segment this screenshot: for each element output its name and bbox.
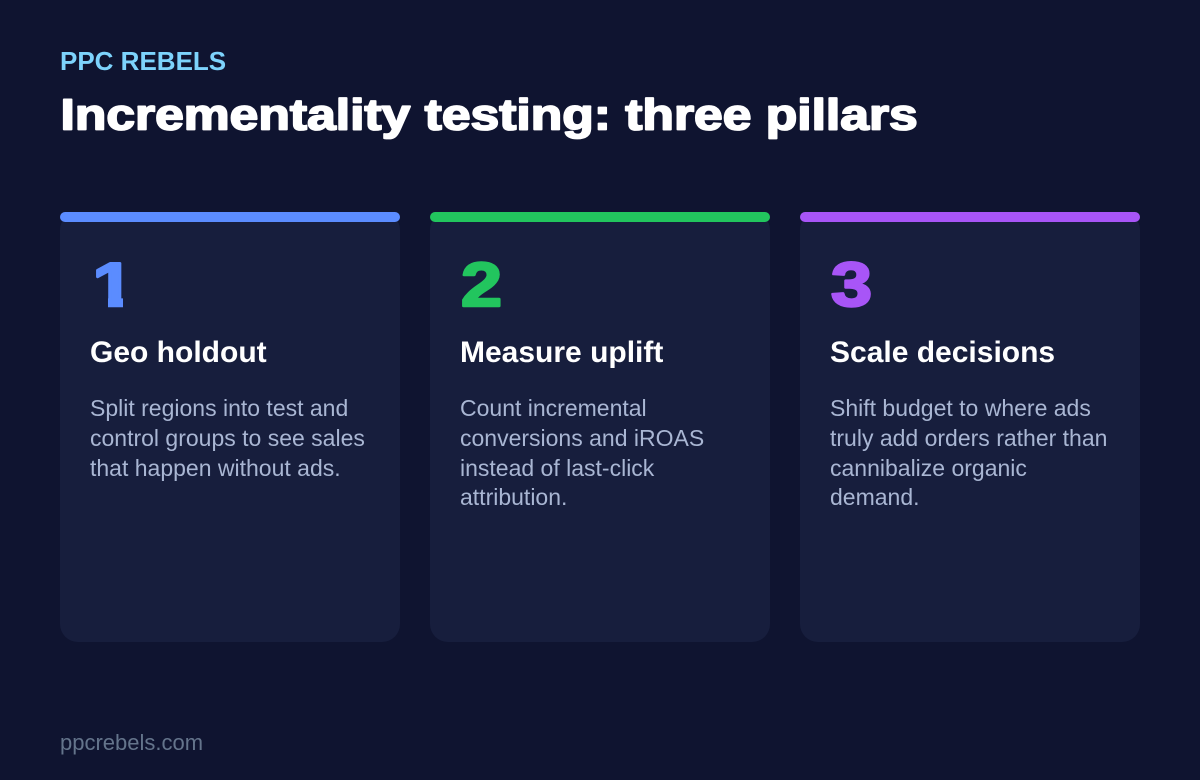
accent bar xyxy=(60,212,400,222)
body text: attribution. xyxy=(460,484,567,510)
brand label: PPC REBELS xyxy=(60,46,226,76)
body text: demand. xyxy=(830,484,920,510)
title: Incrementality testing: three pillars xyxy=(60,91,918,140)
panel: scale decisions xyxy=(800,212,1140,642)
body text: truly add orders rather than xyxy=(830,425,1107,451)
number 2: 2 xyxy=(461,250,502,319)
body text: Count incremental xyxy=(460,395,647,421)
panel: geo holdout xyxy=(60,212,400,642)
accent bar xyxy=(800,212,1140,222)
footer: ppcrebels.com xyxy=(60,730,203,755)
number 3: 3 xyxy=(831,250,872,319)
body text: cannibalize organic xyxy=(830,455,1027,481)
heading: Geo holdout xyxy=(90,336,267,369)
body text: that happen without ads. xyxy=(90,455,341,481)
body text: instead of last-click xyxy=(460,455,655,481)
heading: Measure uplift xyxy=(460,336,663,369)
card background xyxy=(60,212,400,642)
panel: measure uplift xyxy=(430,212,770,642)
body text: Split regions into test and xyxy=(90,395,348,421)
card background xyxy=(800,212,1140,642)
body text: control groups to see sales xyxy=(90,425,365,451)
body text: Shift budget to where ads xyxy=(830,395,1091,421)
accent bar xyxy=(430,212,770,222)
card background xyxy=(430,212,770,642)
body text: conversions and iROAS xyxy=(460,425,704,451)
number 1: 1 xyxy=(92,250,134,319)
heading: Scale decisions xyxy=(830,336,1055,369)
